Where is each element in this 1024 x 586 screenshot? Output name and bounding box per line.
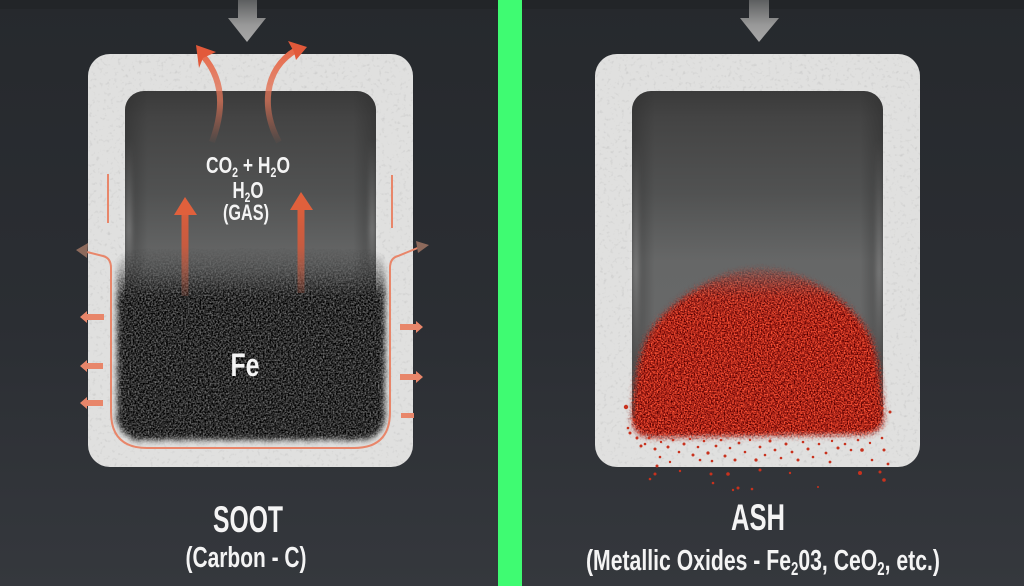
arrow: curved gas exit left	[196, 45, 220, 142]
arrow: gray intake left	[228, 0, 266, 42]
label: Fe: Fe	[230, 347, 260, 383]
gas path line through wall	[83, 247, 420, 448]
label: CO2 + H2O: 2	[271, 164, 277, 180]
label: CO2 + H2O: 2	[232, 164, 238, 180]
gas label	[206, 152, 290, 225]
label: GAS: (GAS)	[223, 200, 269, 225]
filter housing right	[595, 54, 920, 467]
label: H2O: O	[250, 177, 264, 203]
subheading: Metallic Oxides: , etc.)	[885, 545, 940, 577]
panel: ash	[586, 0, 940, 579]
subheading: Metallic Oxides: 03, CeO	[798, 545, 877, 577]
arrow: gray intake right	[740, 0, 779, 42]
panel: soot	[76, 0, 429, 574]
wall flow marks	[80, 174, 423, 418]
subheading: Metallic Oxides: 2	[791, 559, 798, 579]
label: CO2 + H2O: O	[276, 152, 290, 178]
label: H2O: H	[232, 177, 249, 203]
label: CO2 + H2O: + H	[238, 152, 271, 178]
label: H2O: 2	[245, 189, 251, 205]
arrow: rising gas left	[174, 197, 197, 296]
arrow tip: wall exit left	[76, 243, 88, 258]
subheading: Carbon: (Carbon - C)	[186, 542, 306, 574]
subheading: Metallic Oxides: (Metallic Oxides - Fe	[586, 545, 866, 577]
ash pile	[626, 264, 890, 445]
arrow: rising gas right	[290, 192, 313, 293]
center green divider	[498, 0, 522, 586]
soot deposit	[112, 252, 389, 446]
arrow: curved gas exit right	[268, 41, 307, 142]
heading: SOOT: SOOT	[213, 499, 283, 540]
arrow tip: wall exit right	[416, 241, 429, 253]
label: CO2 + H2O: CO	[206, 152, 240, 178]
heading: ASH: ASH	[731, 497, 785, 538]
fallen ash specks	[624, 405, 892, 491]
filter housing left	[88, 54, 413, 467]
subheading: Metallic Oxides: 2	[877, 559, 885, 579]
